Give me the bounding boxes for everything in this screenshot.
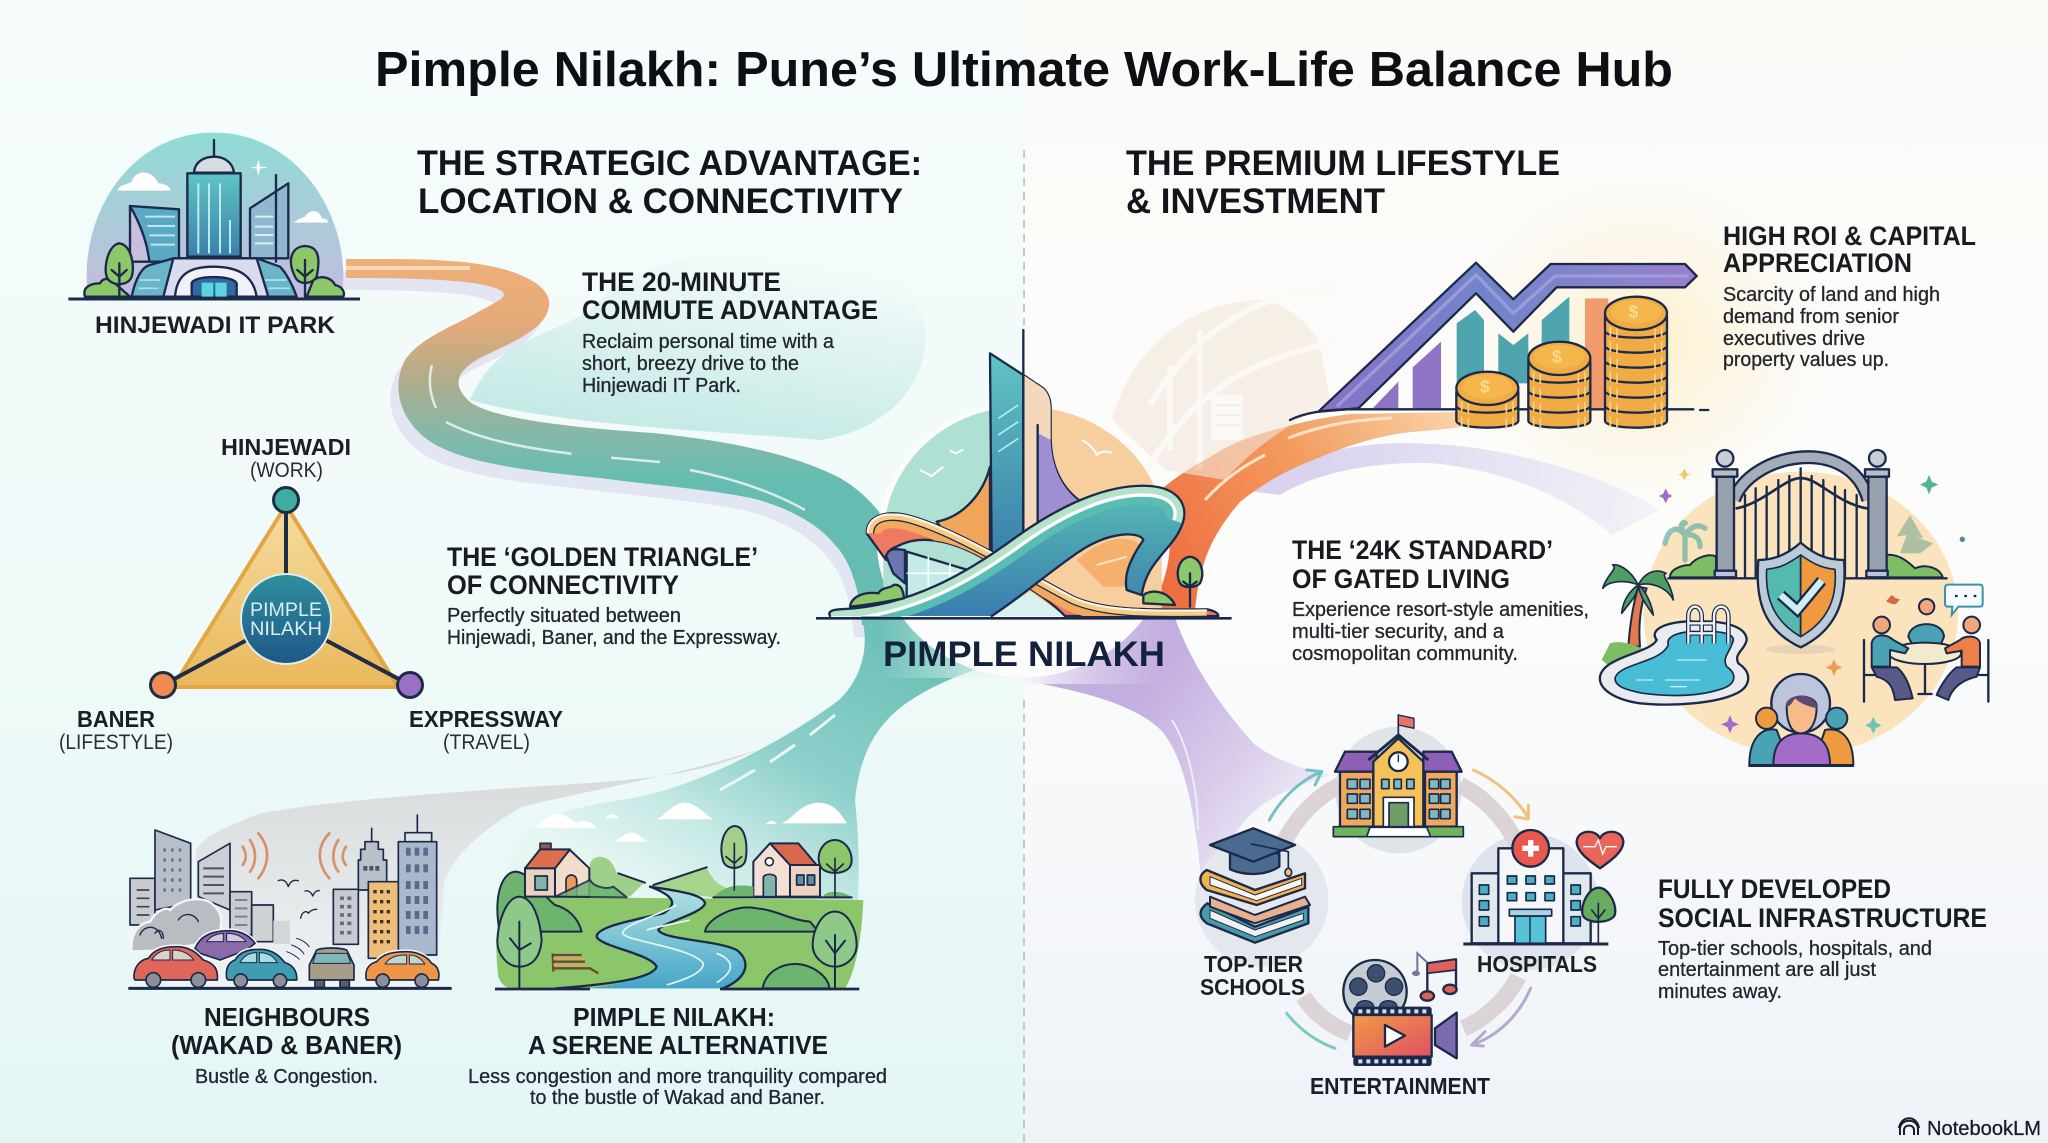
chart: golden triangle [59, 434, 563, 754]
title: Pimple Nilakh: Pune’s Ultimate Work-Life Balance Hub [375, 43, 1673, 97]
chart: golden triangle: PIMPLE [250, 600, 322, 621]
vertex label: travel [409, 706, 563, 754]
label: Hinjewadi IT park: HINJEWADI IT PARK [95, 312, 336, 339]
ribbon: teal [829, 486, 1184, 616]
label: hospitals: HOSPITALS [1477, 951, 1597, 977]
teal road to Pimple Nilakh village [496, 618, 1024, 990]
text block: high ROI: APPRECIATION [1723, 248, 1912, 278]
smog [131, 899, 221, 952]
text block: serene alternative: Less congestion and more tranquility compared [468, 1066, 887, 1088]
community figures [1748, 674, 1854, 766]
panel: lifestyle and investment heading: THE PREMIUM LIFESTYLE [1126, 144, 1560, 183]
vertex label: lifestyle: (LIFESTYLE) [59, 731, 173, 754]
coin stacks: $ [1629, 302, 1639, 322]
road: Hinjewadi to hub [346, 259, 918, 625]
text block: high ROI: HIGH ROI & CAPITAL [1723, 221, 1976, 251]
text block: neighbours: NEIGHBOURS [204, 1002, 370, 1032]
text block: serene alternative: to the bustle of Wakad and Baner. [530, 1087, 825, 1109]
text block: 20-minute commute: Reclaim personal time with a [582, 331, 835, 353]
text block: 24K standard: OF GATED LIVING [1292, 564, 1510, 594]
coin stacks [1456, 297, 1667, 429]
icon: hospital [1463, 830, 1623, 944]
vertex label: travel: EXPRESSWAY [409, 706, 563, 732]
people at table [1864, 585, 1988, 702]
gray road to neighbours [196, 750, 757, 987]
vertex label: lifestyle: BANER [77, 706, 155, 732]
logo: NotebookLM: NotebookLM [1927, 1118, 2041, 1140]
vertex label: work [221, 434, 351, 482]
sparkles [1678, 468, 1691, 480]
panel: connecting roads [196, 245, 1660, 990]
text block: neighbours: (WAKAD & BANER) [171, 1030, 402, 1060]
ribbon: orange [867, 513, 1218, 616]
label: top-tier schools: SCHOOLS [1200, 974, 1305, 1000]
gate bars [1745, 468, 1857, 577]
text block: golden triangle: OF CONNECTIVITY [447, 570, 679, 600]
text block: 24K standard: cosmopolitan community. [1292, 643, 1518, 665]
text block: 24K standard: multi-tier security, and a [1292, 621, 1505, 643]
label: central hub name: PIMPLE NILAKH [883, 635, 1165, 674]
chart: social infrastructure cycle [1195, 715, 1623, 1066]
icon: Hinjewadi IT park [68, 133, 360, 299]
text block: social infrastructure: entertainment are all just [1658, 959, 1876, 981]
vertex label: lifestyle [59, 706, 173, 754]
hub node [241, 574, 331, 664]
palm tree [1603, 565, 1673, 647]
motion lines [287, 938, 309, 959]
text block: social infrastructure [1658, 874, 1987, 1003]
pale teal blob behind commute text [470, 245, 925, 440]
text block: 20-minute commute: short, breezy drive to the [582, 353, 799, 375]
ring arcs [1283, 785, 1518, 1033]
text block: neighbours [171, 1002, 402, 1088]
road shadow [338, 271, 910, 637]
text block: serene alternative: PIMPLE NILAKH: [573, 1002, 775, 1032]
icon: congested neighbours city [128, 815, 452, 988]
text block: 24K standard: THE ‘24K STANDARD’ [1292, 535, 1553, 565]
text block: high ROI [1723, 221, 1976, 371]
noise waves [243, 833, 346, 878]
text block: social infrastructure: minutes away. [1658, 981, 1782, 1003]
label: top-tier schools: TOP-TIER [1204, 951, 1303, 977]
vertex label: travel: (TRAVEL) [443, 731, 530, 754]
chart: rising arrow with coins [1290, 263, 1708, 429]
trees and bushes [497, 826, 857, 988]
text block: golden triangle: Hinjewadi, Baner, and the Expressway. [447, 627, 781, 649]
vertex label: work: (WORK) [250, 459, 323, 482]
text block: 24K standard [1292, 535, 1589, 665]
text block: serene alternative [468, 1002, 887, 1109]
text block: high ROI: demand from senior [1723, 306, 1899, 328]
text block: social infrastructure: FULLY DEVELOPED [1658, 874, 1891, 904]
baseline [1290, 409, 1693, 420]
panel: location and connectivity heading [417, 144, 922, 221]
label: top-tier schools [1200, 951, 1305, 1000]
text block: 20-minute commute: THE 20-MINUTE [582, 267, 781, 297]
text block: 24K standard: Experience resort-style amenities, [1292, 599, 1589, 621]
houses [525, 843, 820, 897]
text block: high ROI: Scarcity of land and high [1723, 284, 1940, 306]
birds [278, 880, 319, 918]
arrows [1269, 770, 1531, 1048]
text block: social infrastructure: Top-tier schools, hospitals, and [1658, 938, 1932, 960]
bushes and tree [850, 557, 1202, 607]
label: entertainment: ENTERTAINMENT [1310, 1073, 1490, 1099]
panel: location and connectivity heading: THE STRATEGIC ADVANTAGE: [417, 144, 922, 183]
text block: 20-minute commute: COMMUTE ADVANTAGE [582, 295, 878, 325]
vertex label: work: HINJEWADI [221, 434, 351, 460]
icon: cinema and music [1343, 953, 1457, 1066]
buildings [130, 815, 437, 958]
shield [1758, 543, 1845, 654]
nodes [150, 488, 422, 698]
cars [134, 931, 439, 987]
panel: lifestyle and investment heading [1126, 144, 1560, 221]
coin stacks: $ [1552, 347, 1562, 367]
text block: golden triangle: Perfectly situated between [447, 605, 681, 627]
faded skyline behind chart [1112, 290, 1340, 480]
icon: serene village landscape [495, 803, 863, 989]
soft circles behind icons [1195, 727, 1598, 970]
icon: gated community [1600, 450, 1988, 766]
purple road to social infrastructure [1024, 618, 1330, 890]
background trees [1665, 515, 1933, 560]
arrow [1318, 263, 1697, 412]
hills and ground [496, 897, 863, 988]
orange road to investment [1100, 412, 1462, 610]
river [590, 887, 745, 988]
text block: 20-minute commute: Hinjewadi IT Park. [582, 375, 741, 397]
pool [1600, 607, 1748, 705]
chart: golden triangle: NILAKH [250, 619, 322, 640]
coin stacks: $ [1480, 377, 1490, 397]
pillars [1713, 450, 1889, 577]
text block: 20-minute commute [582, 267, 878, 397]
bushes [1670, 555, 1943, 577]
icon: books and graduation cap [1200, 828, 1310, 943]
text block: serene alternative: A SERENE ALTERNATIVE [528, 1030, 828, 1060]
lavender road to gated living [1240, 443, 1660, 535]
text block: golden triangle: THE ‘GOLDEN TRIANGLE’ [447, 542, 758, 572]
text block: high ROI: executives drive [1723, 328, 1865, 350]
text block: golden triangle [447, 542, 781, 649]
panel: location and connectivity heading: LOCATION & CONNECTIVITY [418, 182, 903, 221]
icon: central landmark building [816, 330, 1232, 677]
text block: high ROI: property values up. [1723, 349, 1889, 371]
text block: social infrastructure: SOCIAL INFRASTRUCTURE [1658, 903, 1987, 933]
bars [1373, 297, 1608, 408]
text block: neighbours: Bustle & Congestion. [195, 1066, 378, 1088]
arch [1734, 457, 1868, 500]
icon: school building [1333, 715, 1463, 837]
panel: lifestyle and investment heading: & INVESTMENT [1126, 182, 1385, 221]
clouds [535, 803, 847, 842]
